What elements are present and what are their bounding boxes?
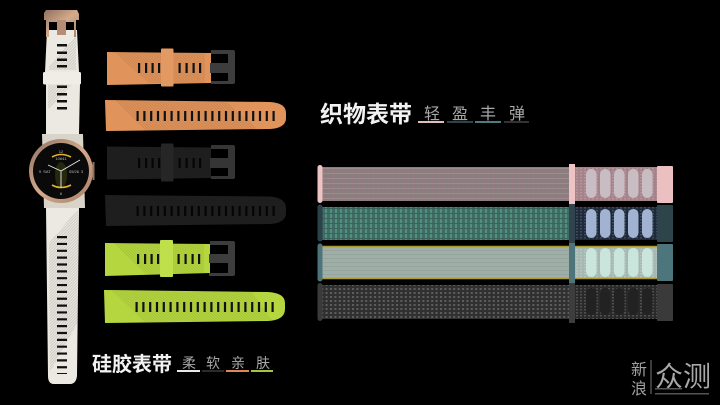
watch with white strap [29,10,94,384]
dial labels: 05/26 [69,169,80,174]
hatching [114,243,204,274]
dial labels: 3 [81,169,84,174]
buckle [209,241,235,276]
silicone keywords: 亲 [231,355,245,371]
ovals [586,169,652,198]
fabric keywords [424,105,525,123]
upper strap holes [57,44,67,110]
fabric keywords: 丰 [480,105,496,123]
holes [136,206,276,216]
keeper loop [43,72,81,84]
buckle [210,145,235,179]
dial labels [39,149,84,196]
silicone keywords [182,355,270,371]
watermark: 众测 [655,361,711,392]
black long strap [105,195,286,226]
ovals [586,248,652,277]
lugs [42,134,85,208]
dial labels: SAT [43,169,51,174]
fabric keywords: 轻 [424,105,440,123]
keeper [569,164,575,204]
dial labels: 10641 [55,156,67,161]
fabric keywords: 弹 [509,105,525,123]
keeper [161,48,174,86]
green long strap [104,290,285,323]
right segment [575,246,657,279]
green short strap [105,240,235,277]
watermark: 浪 [631,380,647,398]
right segment [575,285,657,319]
lower strap holes [57,236,67,374]
ovals [586,209,652,238]
dark fabric strap [318,283,673,323]
silicone keywords: 柔 [182,355,196,371]
holes [138,158,201,168]
right tab [657,205,673,242]
hatching [115,100,258,131]
right tab [657,244,673,281]
hatching [112,291,272,322]
dial [33,143,89,199]
keeper [160,240,173,277]
dial green trace [55,162,67,188]
silicone keywords: 肤 [256,355,270,371]
keeper [161,144,174,182]
orange long strap [105,100,286,131]
holes [138,63,201,73]
yellow arcs [52,154,71,188]
silicone colour underlines [177,370,273,372]
upper strap hatching [48,36,76,108]
pink fabric strap [318,164,673,204]
teal fabric strap [318,204,673,244]
dial labels: 6 [60,191,63,196]
dial labels: 9 [39,169,42,174]
left tab [318,165,322,203]
right tab [657,284,673,321]
keeper [569,283,575,323]
lower strap [46,208,79,384]
dial labels: 12 [59,149,64,154]
right segment [575,167,657,201]
sage fabric strap [318,243,673,283]
holes [136,111,276,121]
buckle [210,50,235,84]
holes [137,254,200,264]
fabric colour underlines [418,121,529,123]
keeper [569,243,575,283]
upper strap [45,30,80,134]
watermark: 新 [631,361,647,379]
silicone keywords: 软 [206,355,220,371]
buckle [44,10,79,37]
black short strap [107,144,235,182]
fabric heading: 织物表带 [320,101,412,127]
ovals [586,288,652,315]
crown [92,162,94,180]
orange short strap [107,48,235,86]
lower strap hatching [49,209,78,372]
hatching [116,53,205,83]
left tab [318,204,322,242]
left tab [318,283,322,321]
keeper [569,204,575,244]
left tab [318,244,322,282]
watermark [631,360,711,398]
silicone heading: 硅胶表带 [92,352,172,376]
dial hands [48,160,80,188]
fabric keywords: 盈 [452,106,468,123]
watch case bezel [29,139,93,203]
buckle tongue [57,20,66,35]
right tab [657,166,673,203]
right segment [575,207,657,240]
holes [136,302,275,312]
yellow edges [322,246,657,278]
